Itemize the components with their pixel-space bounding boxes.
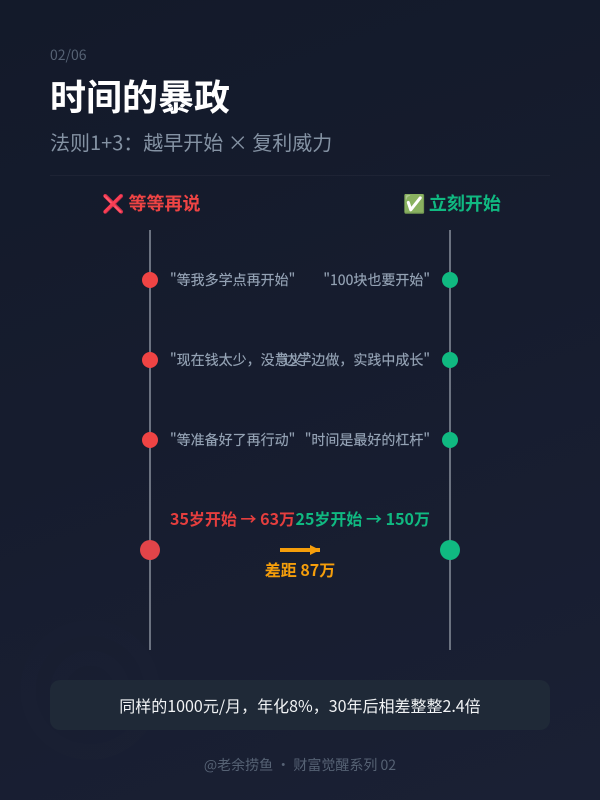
title: 时间的暴政 xyxy=(50,69,230,121)
subtitle: 法则1+3：越早开始 × 复利威力 xyxy=(50,127,332,156)
result right: 25岁开始 → 150万 xyxy=(296,506,430,530)
quote right 1: "100块也要开始" xyxy=(323,270,430,290)
left timeline xyxy=(140,230,160,650)
axis xyxy=(149,230,151,650)
column header: wait: ❌ 等等再说 xyxy=(102,190,201,216)
arrow: gap xyxy=(280,545,320,555)
quote left 3: "等准备好了再行动" xyxy=(170,430,295,450)
column header: start now: ✅ 立刻开始 xyxy=(403,190,501,216)
page number: 02/06 xyxy=(50,45,87,65)
axis xyxy=(449,230,451,650)
node 3 xyxy=(442,432,458,448)
node 2 xyxy=(142,352,158,368)
quote right 3: "时间是最好的杠杆" xyxy=(305,430,430,450)
summary text: 同样的1000元/月，年化8%，30年后相差整整2.4倍 xyxy=(119,693,481,717)
result left: 35岁开始 → 63万 xyxy=(170,506,295,530)
footer: @老余捞鱼 · 财富觉醒系列 02 xyxy=(204,755,396,775)
node result xyxy=(140,540,160,560)
divider xyxy=(50,175,550,176)
node 1 xyxy=(442,272,458,288)
node 1 xyxy=(142,272,158,288)
quote left 2: "现在钱太少，没意义" xyxy=(170,350,309,370)
quote left 1: "等我多学点再开始" xyxy=(170,270,295,290)
right timeline xyxy=(440,230,460,650)
node 2 xyxy=(442,352,458,368)
summary box xyxy=(50,680,550,730)
quote right 2: "边学边做，实践中成长" xyxy=(277,350,430,370)
gap label: 差距 87万 xyxy=(265,557,335,581)
node result xyxy=(440,540,460,560)
node 3 xyxy=(142,432,158,448)
